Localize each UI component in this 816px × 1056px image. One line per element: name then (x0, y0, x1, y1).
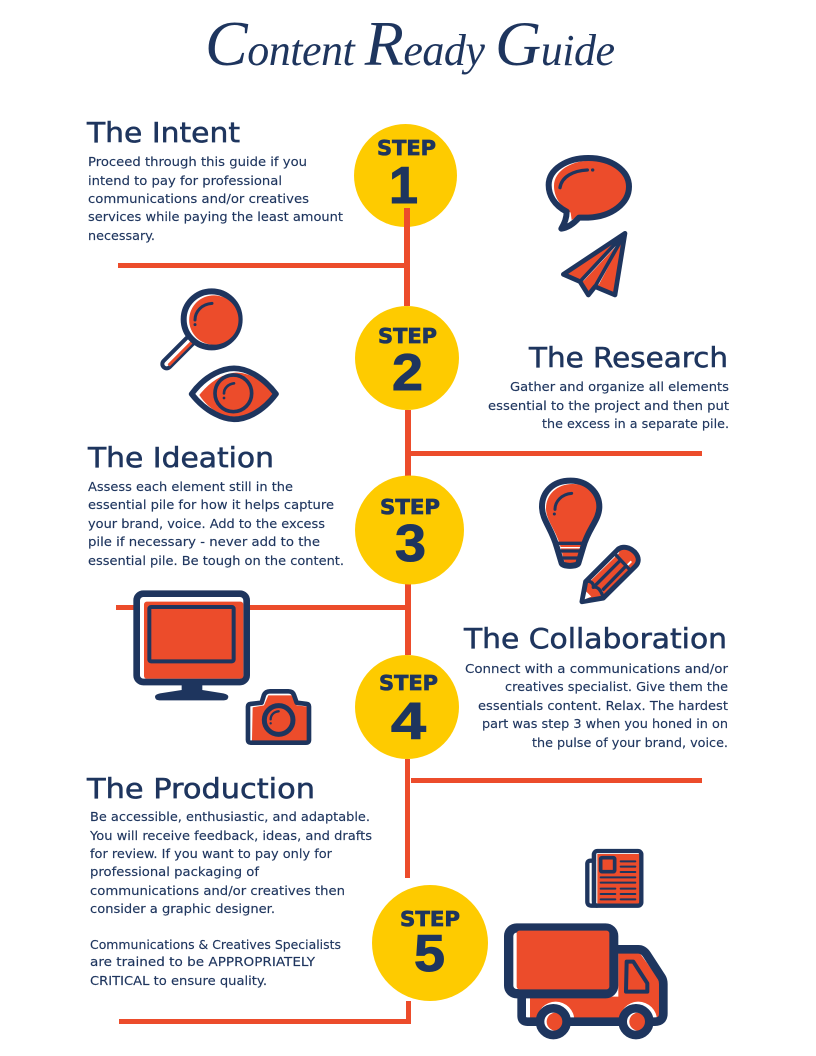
body: the intent: necessary. (88, 228, 155, 243)
icon: delivery truck (509, 928, 663, 1039)
heading: the ideation: The Ideation (87, 441, 274, 474)
text block: the ideation (87, 441, 344, 568)
heading: the collaboration: The Collaboration (463, 622, 727, 655)
icon: paper plane (563, 233, 625, 295)
step 3 badge: STEP (380, 495, 440, 519)
text block: the research (488, 341, 729, 431)
body: the intent: communications and/or creatives (88, 191, 309, 206)
step 1 badge (354, 124, 457, 228)
icon: speech bubble (549, 158, 629, 229)
step 2 badge: STEP (378, 324, 437, 348)
icon: magnifying glass (167, 291, 240, 365)
text block: the collaboration (463, 622, 729, 750)
step 2 badge (355, 306, 459, 410)
body: the collaboration: part was step 3 when you honed in on (482, 716, 728, 731)
body: the intent: services while paying the least amount (88, 209, 343, 224)
body: the ideation: essential pile. Be tough on the content. (88, 553, 344, 568)
icon: pencil (581, 547, 639, 602)
text block: the intent (86, 116, 343, 243)
body: the production: are trained to be APPROPRIATELY (90, 954, 315, 969)
icon: camera (248, 691, 309, 743)
body: the production: Be accessible, enthusiastic, and adaptable. (90, 809, 370, 824)
title: Content Ready Guide (205, 8, 615, 79)
step 2 badge: 2 (392, 344, 423, 402)
icon: monitor (137, 594, 247, 700)
body: the production: professional packaging of (90, 864, 260, 879)
body: the collaboration: creatives specialist. Give them the (505, 679, 728, 694)
body: the ideation (88, 479, 344, 568)
body: the production: Communications & Creatives Specialists (90, 937, 341, 952)
step 4 badge: 4 (391, 693, 426, 751)
step 4 badge: STEP (379, 671, 438, 695)
body: the research (488, 379, 729, 431)
body: the production: consider a graphic designer. (90, 901, 275, 916)
body: the production: communications and/or creatives then (90, 883, 345, 898)
step 5 badge (372, 885, 488, 1001)
body: the intent: intend to pay for professional (88, 173, 282, 188)
step 4 badge (355, 655, 459, 759)
body: the research: essential to the project and then put (488, 398, 729, 413)
step 3 badge: 3 (395, 515, 426, 573)
body: the production: You will receive feedback, ideas, and drafts (89, 828, 372, 843)
body: the research: Gather and organize all elements (510, 379, 729, 394)
timeline connectors (116, 208, 702, 1024)
step 1 badge: STEP (377, 136, 436, 160)
icon: eye (192, 368, 276, 419)
heading: the research: The Research (528, 341, 728, 374)
body: the collaboration: Connect with a communications and/or (465, 661, 729, 676)
body: the intent (88, 154, 343, 243)
body: the ideation: essential pile for how it helps capture (88, 497, 334, 512)
step 1 badge: 1 (389, 157, 418, 215)
icon: light bulb (542, 481, 599, 566)
body: the production: for review. If you want to pay only for (90, 846, 333, 861)
icon: newspaper (587, 851, 641, 906)
body: the ideation: your brand, voice. Add to the excess (88, 516, 325, 531)
heading: the intent: The Intent (86, 116, 240, 149)
body: the ideation: pile if necessary - never add to the (88, 534, 320, 549)
body: the intent: Proceed through this guide if you (88, 154, 307, 169)
step 5 badge: STEP (400, 907, 460, 931)
body: the research: the excess in a separate pile. (542, 416, 729, 431)
body: the collaboration (465, 661, 729, 750)
text block: the production (86, 772, 372, 988)
step 3 badge (355, 476, 464, 584)
step 5 badge: 5 (414, 925, 445, 983)
body: the production (89, 809, 372, 988)
body: the ideation: Assess each element still in the (88, 479, 293, 494)
body: the production: CRITICAL to ensure quality. (90, 973, 267, 988)
heading: the production: The Production (86, 772, 315, 805)
body: the collaboration: the pulse of your brand, voice. (532, 735, 728, 750)
body: the collaboration: essentials content. Relax. The hardest (478, 698, 728, 713)
